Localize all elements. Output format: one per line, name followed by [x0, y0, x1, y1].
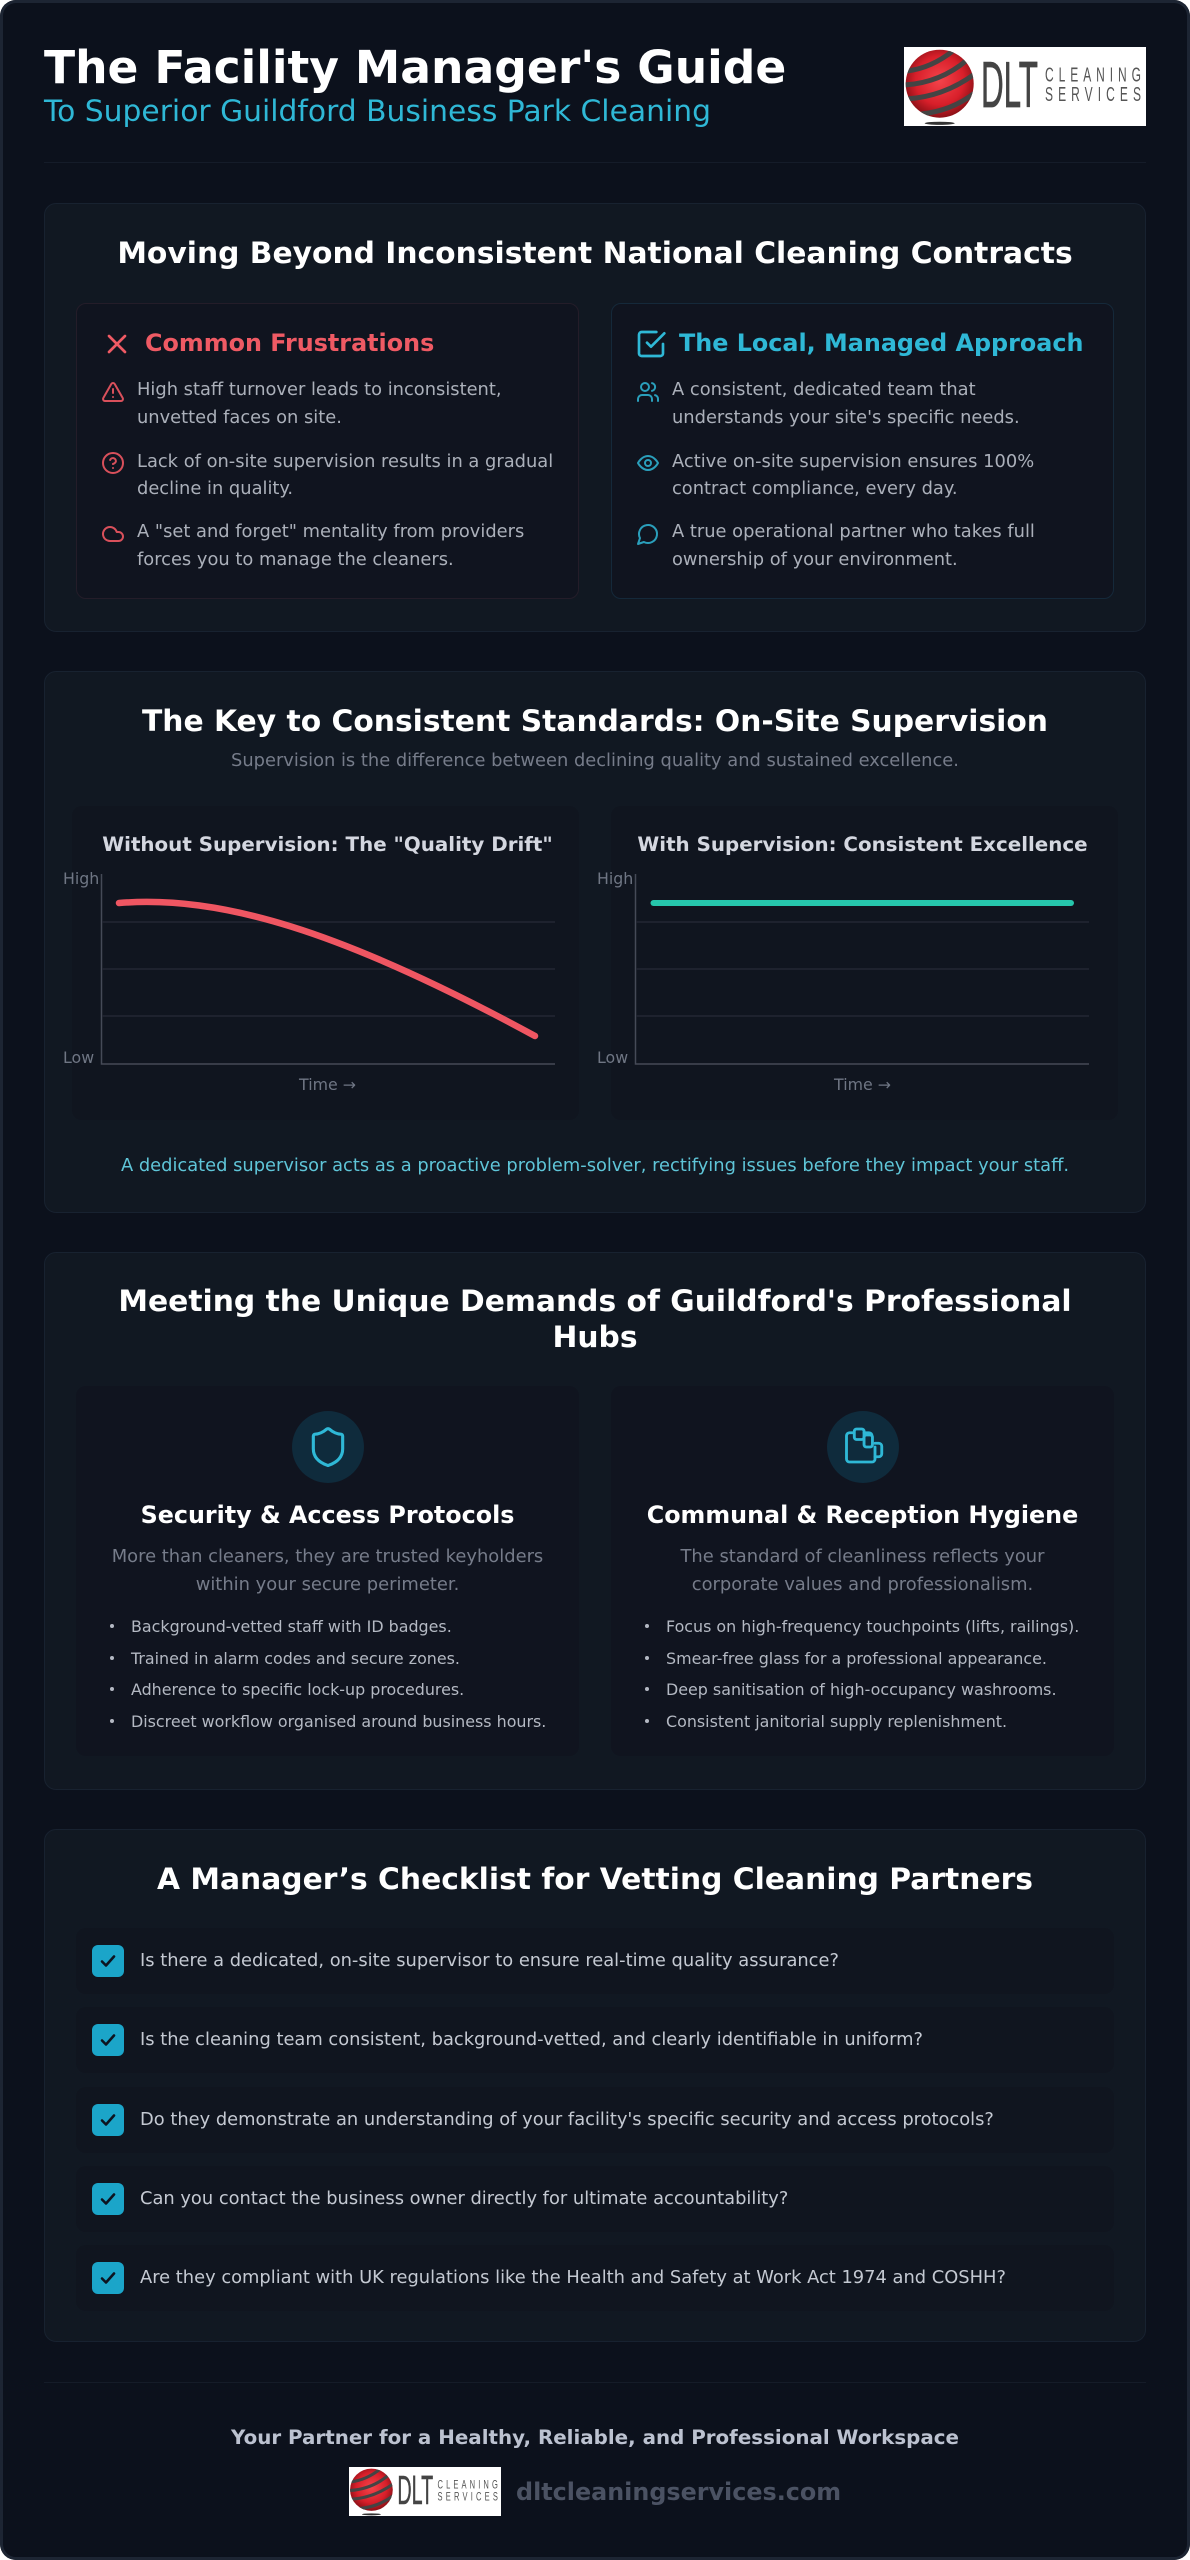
label: low: Low — [597, 1048, 628, 1067]
text: consistent team: A consistent, dedicated team that — [672, 379, 976, 400]
panel: common frustrations — [76, 303, 579, 599]
card: security — [76, 1386, 579, 1756]
text: set and forget — [137, 521, 524, 570]
text: hygiene description: The standard of cleanliness reflects your — [680, 1546, 1044, 1566]
icon: team — [637, 382, 659, 402]
text: hygiene description: corporate values and professionalism. — [692, 1574, 1033, 1594]
heading: key to consistent standards: The Key to Consistent Standards: On-Site Supervision — [142, 704, 1048, 738]
heading: moving beyond: Moving Beyond Inconsistent National Cleaning Contracts — [117, 236, 1073, 270]
text: consistent team — [672, 379, 1020, 428]
footer website: dltcleaningservices.com — [516, 2478, 841, 2506]
footer logo — [349, 2467, 501, 2516]
text: set and forget: forces you to manage the cleaners. — [137, 549, 454, 570]
icon: check 1 — [92, 1945, 124, 1977]
icon: check 5 — [92, 2262, 124, 2294]
panel: checklist — [44, 1829, 1146, 2342]
text: question 3: Do they demonstrate an understanding of your facility's specific security and access protocols? — [140, 2109, 994, 2130]
panel: local managed approach — [611, 303, 1114, 599]
panel: on-site supervision — [44, 671, 1146, 1213]
icon: question — [102, 452, 124, 474]
text: staff turnover: unvetted faces on site. — [137, 407, 342, 428]
text: lack of supervision: decline in quality. — [137, 478, 293, 499]
list: security points: Trained in alarm codes and secure zones. — [131, 1648, 460, 1668]
text: operational partner: A true operational partner who takes full — [672, 521, 1035, 542]
text: question 4: Can you contact the business owner directly for ultimate accountability? — [140, 2188, 788, 2209]
checklist item 2 — [76, 2007, 1114, 2073]
footer logo: DLT — [397, 2467, 433, 2513]
icon: check 3 — [92, 2104, 124, 2136]
list: hygiene points: Deep sanitisation of high-occupancy washrooms. — [666, 1680, 1056, 1698]
logo: DLT Cleaning Services — [904, 47, 1146, 126]
list: security points: Background-vetted staff with ID badges. — [131, 1616, 452, 1636]
label: high: High — [597, 869, 633, 888]
checklist item 4 — [76, 2166, 1114, 2232]
text: security description — [112, 1546, 543, 1594]
text: security description: within your secure perimeter. — [196, 1574, 459, 1594]
icon: check square — [638, 330, 666, 358]
checklist item 3 — [76, 2087, 1114, 2153]
heading: common frustrations: Common Frustrations — [145, 329, 434, 357]
panel: moving beyond national contracts — [44, 203, 1146, 632]
list: security points — [110, 1616, 546, 1730]
text: active supervision — [672, 450, 1034, 499]
text: question 2: Is the cleaning team consistent, background-vetted, and clearly identifiable in uniform? — [140, 2029, 923, 2050]
title: The Facility Manager's Guide — [44, 40, 786, 94]
line chart: declining quality — [100, 874, 555, 1065]
label: high: High — [63, 869, 99, 888]
heading: hygiene: Communal & Reception Hygiene — [647, 1501, 1078, 1529]
list: hygiene points: Focus on high-frequency touchpoints (lifts, railings). — [666, 1616, 1079, 1636]
heading: checklist: A Manager’s Checklist for Vetting Cleaning Partners — [157, 1862, 1033, 1896]
chart title: consistent excellence: With Supervision: Consistent Excellence — [637, 833, 1088, 856]
subtitle: To Superior Guildford Business Park Cleaning — [44, 94, 711, 129]
label: low: Low — [63, 1048, 94, 1067]
heading: local managed approach: The Local, Managed Approach — [679, 329, 1083, 357]
text: staff turnover: High staff turnover leads to inconsistent, — [137, 379, 502, 400]
chart title: quality drift: Without Supervision: The "Quality Drift" — [102, 833, 553, 856]
label: time: Time → — [834, 1074, 891, 1094]
text: staff turnover — [137, 379, 502, 428]
logo: DLT Cleaning Services: CLEANING — [1045, 65, 1141, 86]
checklist item 5 — [76, 2245, 1114, 2311]
list: security points: Adherence to specific lock-up procedures. — [131, 1680, 464, 1698]
icon: clipboard — [827, 1411, 899, 1483]
chart: with supervision — [611, 806, 1118, 1120]
list: hygiene points — [645, 1616, 1079, 1730]
footer logo: CLEANING — [438, 2479, 498, 2492]
text: hygiene description — [680, 1546, 1044, 1594]
chart: without supervision — [72, 806, 579, 1120]
text: active supervision: contract compliance, every day. — [672, 478, 958, 499]
text: consistent team: understands your site's specific needs. — [672, 407, 1020, 428]
checklist item 1 — [76, 1928, 1114, 1994]
panel: guildford hubs — [44, 1252, 1146, 1790]
heading: unique demands: Meeting the Unique Demands of Guildford's Professional — [118, 1284, 1072, 1319]
icon: cloud — [102, 526, 124, 542]
logo: DLT Cleaning Services: DLT — [981, 48, 1038, 121]
text: security description: More than cleaners, they are trusted keyholders — [112, 1546, 543, 1566]
icon: cross — [108, 334, 126, 354]
icon: speech bubble — [637, 524, 658, 545]
text: set and forget: A "set and forget" mentality from providers — [137, 521, 524, 542]
logo: DLT Cleaning Services: SERVICES — [1045, 84, 1141, 106]
text: lack of supervision: Lack of on-site supervision results in a gradual — [137, 450, 553, 472]
icon: check 4 — [92, 2183, 124, 2215]
text: question 5: Are they compliant with UK regulations like the Health and Safety at Work Act 1974 and COSHH? — [140, 2267, 1006, 2288]
text: operational partner: ownership of your environment. — [672, 549, 958, 570]
text: active supervision: Active on-site supervision ensures 100% — [672, 450, 1034, 472]
text: operational partner — [672, 521, 1035, 570]
line chart: consistent quality — [634, 874, 1089, 1065]
footer tagline: Your Partner for a Healthy, Reliable, and Professional Workspace — [231, 2426, 959, 2449]
footer logo: SERVICES — [438, 2491, 498, 2504]
callout: dedicated supervisor: A dedicated supervisor acts as a proactive problem-solver, rectifying issues before they impact your staff. — [121, 1154, 1069, 1176]
heading: unique demands — [118, 1284, 1072, 1355]
card: hygiene — [611, 1386, 1114, 1756]
list: security points: Discreet workflow organised around business hours. — [131, 1712, 546, 1730]
list: hygiene points: Consistent janitorial supply replenishment. — [666, 1712, 1007, 1730]
icon: eye — [637, 455, 659, 471]
text: question 1: Is there a dedicated, on-site supervisor to ensure real-time quality assurance? — [140, 1950, 839, 1971]
heading: unique demands: Hubs — [552, 1320, 638, 1355]
label: time: Time → — [299, 1074, 356, 1094]
icon: warning triangle — [102, 382, 124, 402]
heading: security: Security & Access Protocols — [141, 1501, 514, 1529]
text: supervision subtitle: Supervision is the difference between declining quality and sustained excellence. — [231, 750, 959, 771]
icon: check 2 — [92, 2024, 124, 2056]
text: lack of supervision — [137, 450, 553, 499]
icon: shield — [292, 1411, 364, 1483]
list: hygiene points: Smear-free glass for a professional appearance. — [666, 1648, 1047, 1668]
